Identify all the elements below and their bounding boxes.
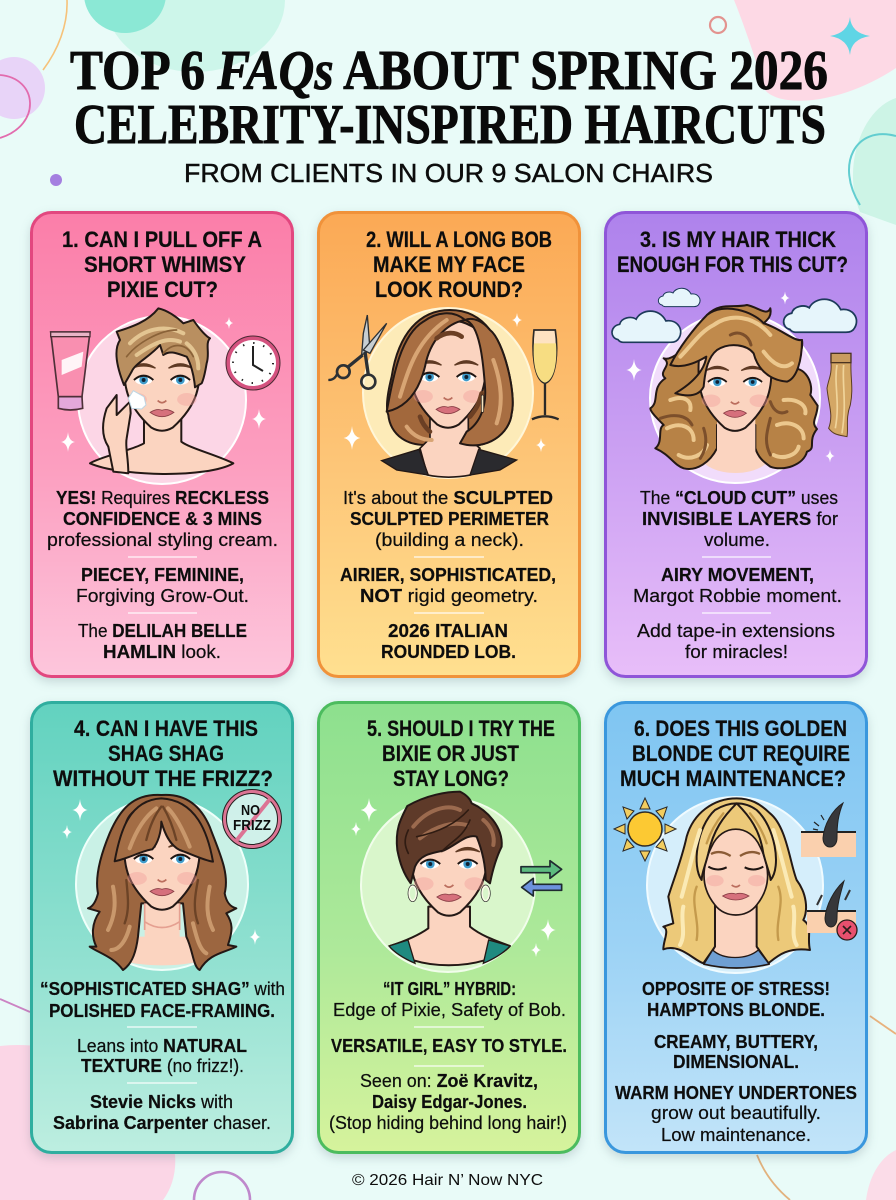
- question 4 heading: WITHOUT THE FRIZZ?: [53, 766, 273, 791]
- icons: sparkles: [61, 317, 266, 452]
- subtitle: FROM CLIENTS IN OUR 9 SALON CHAIRS: [184, 158, 713, 188]
- illustration: golden blonde portrait: [647, 797, 823, 973]
- question 5 heading: BIXIE OR JUST: [382, 741, 519, 766]
- answer text: HAMPTONS BLONDE.: [647, 999, 825, 1020]
- question 6 heading: 6. DOES THIS GOLDEN: [634, 716, 847, 741]
- answer text: [47, 487, 278, 662]
- question 1 heading: SHORT WHIMSY: [84, 252, 246, 277]
- icon: swap arrows: [521, 861, 562, 896]
- answer text: “IT GIRL” HYBRID:: [383, 978, 516, 999]
- panel: FAQ 4 shag: [32, 702, 292, 1152]
- icons: sparkles: [351, 798, 556, 957]
- panel: FAQ 2 long bob: [318, 212, 580, 676]
- icon: no frizz: NO: [241, 802, 260, 819]
- answer text: Leans into NATURAL: [77, 1035, 247, 1056]
- icon: clock: [226, 336, 280, 390]
- icon: no frizz: FRIZZ: [233, 817, 271, 834]
- question 3 heading: ENOUGH FOR THIS CUT?: [617, 252, 848, 277]
- icon: clouds: [612, 288, 857, 342]
- answer text: (Stop hiding behind long hair!): [329, 1112, 567, 1133]
- answer text: Low maintenance.: [661, 1124, 811, 1145]
- title: TOP 6 FAQs ABOUT SPRING 2026: [70, 40, 828, 102]
- question 1 heading: PIXIE CUT?: [107, 277, 218, 302]
- question 2 heading: 2. WILL A LONG BOB: [366, 227, 552, 252]
- panel: FAQ 6 golden blonde: [606, 702, 866, 1152]
- answer text: ROUNDED LOB.: [381, 641, 516, 662]
- answer text: CONFIDENCE & 3 MINS: [63, 508, 262, 529]
- footer copyright: © 2026 Hair N’ Now NYC: [352, 1172, 543, 1189]
- question 2 heading: LOOK ROUND?: [375, 277, 523, 302]
- answer text: “SOPHISTICATED SHAG” with: [40, 978, 285, 999]
- question 4 heading: [53, 716, 273, 791]
- answer text: The “CLOUD CUT” uses: [640, 487, 838, 508]
- question 3 heading: [617, 227, 848, 277]
- answer text: [40, 978, 285, 1133]
- icons: sparkles: [626, 292, 835, 462]
- answer text: HAMLIN look.: [103, 641, 221, 662]
- illustration: long bob portrait: [363, 308, 533, 478]
- question 6 heading: [620, 716, 850, 791]
- answer text: volume.: [704, 529, 770, 550]
- answer text: VERSATILE, EASY TO STYLE.: [331, 1035, 567, 1056]
- panel: FAQ 5 bixie: [318, 702, 580, 1152]
- answer text: [340, 487, 556, 662]
- illustration: cloud cut portrait: [650, 305, 820, 483]
- icon: hair extension: [827, 353, 852, 437]
- answer text: (building a neck).: [375, 529, 524, 550]
- answer text: OPPOSITE OF STRESS!: [642, 978, 830, 999]
- answer text: CREAMY, BUTTERY,: [654, 1031, 818, 1052]
- answer text: for miracles!: [685, 641, 788, 662]
- answer text: [329, 978, 567, 1133]
- icons: sparkles: [344, 313, 546, 452]
- answer text: grow out beautifully.: [651, 1102, 821, 1123]
- question 4 heading: 4. CAN I HAVE THIS: [74, 716, 258, 741]
- icon: styling cream tube: [51, 332, 90, 410]
- answer text: It's about the SCULPTED: [343, 487, 553, 508]
- illustration: shag portrait: [76, 795, 248, 970]
- icon: champagne glass: [532, 330, 559, 419]
- question 2 heading: MAKE MY FACE: [373, 252, 525, 277]
- answer text: POLISHED FACE-FRAMING.: [49, 1000, 275, 1021]
- answer text: AIRIER, SOPHISTICATED,: [340, 564, 556, 585]
- answer text: SCULPTED PERIMETER: [350, 508, 549, 529]
- answer text: TEXTURE (no frizz!).: [81, 1055, 244, 1076]
- panel: FAQ 1 pixie cut: [32, 212, 292, 676]
- answer text: Edge of Pixie, Safety of Bob.: [333, 999, 566, 1020]
- question 5 heading: [367, 716, 555, 791]
- icon: sun: [614, 798, 676, 861]
- question 1 heading: 1. CAN I PULL OFF A: [62, 227, 262, 252]
- question 4 heading: SHAG SHAG: [108, 741, 224, 766]
- answer text: PIECEY, FEMININE,: [81, 564, 244, 585]
- answer text: NOT rigid geometry.: [360, 585, 538, 606]
- answer text: INVISIBLE LAYERS for: [642, 508, 838, 529]
- answer text: Stevie Nicks with: [90, 1091, 233, 1112]
- illustration: bixie portrait: [361, 792, 535, 972]
- answer text: WARM HONEY UNDERTONES: [615, 1082, 857, 1103]
- answer text: [633, 487, 842, 662]
- answer text: 2026 ITALIAN: [388, 620, 508, 641]
- answer text: AIRY MOVEMENT,: [661, 564, 814, 585]
- answer text: professional styling cream.: [47, 529, 278, 550]
- title: [70, 40, 828, 156]
- answer text: Margot Robbie moment.: [633, 585, 842, 606]
- question 3 heading: 3. IS MY HAIR THICK: [640, 227, 836, 252]
- answer text: YES! Requires RECKLESS: [56, 487, 269, 508]
- icon: scissors: [328, 315, 387, 389]
- question 2 heading: [366, 227, 552, 302]
- panel: FAQ 3 cloud cut: [606, 212, 866, 676]
- question 5 heading: 5. SHOULD I TRY THE: [367, 716, 555, 741]
- question 6 heading: MUCH MAINTENANCE?: [620, 766, 846, 791]
- answer text: DIMENSIONAL.: [673, 1051, 799, 1072]
- answer text: [615, 978, 857, 1145]
- answer text: The DELILAH BELLE: [78, 620, 247, 641]
- question 5 heading: STAY LONG?: [393, 766, 509, 791]
- icon: healthy hair follicle: [801, 803, 856, 857]
- answer text: Sabrina Carpenter chaser.: [53, 1112, 271, 1133]
- answer text: Forgiving Grow-Out.: [76, 585, 249, 606]
- answer text: Seen on: Zoë Kravitz,: [360, 1070, 538, 1091]
- question 1 heading: [62, 227, 262, 302]
- icons: sparkles: [62, 799, 261, 945]
- illustration: pixie portrait: [78, 308, 246, 484]
- icon: no frizz: [224, 792, 280, 846]
- answer text: Daisy Edgar-Jones.: [372, 1091, 527, 1112]
- answer text: Add tape-in extensions: [637, 620, 835, 641]
- question 6 heading: BLONDE CUT REQUIRE: [632, 741, 850, 766]
- icon: damaged hair follicle: [807, 881, 857, 940]
